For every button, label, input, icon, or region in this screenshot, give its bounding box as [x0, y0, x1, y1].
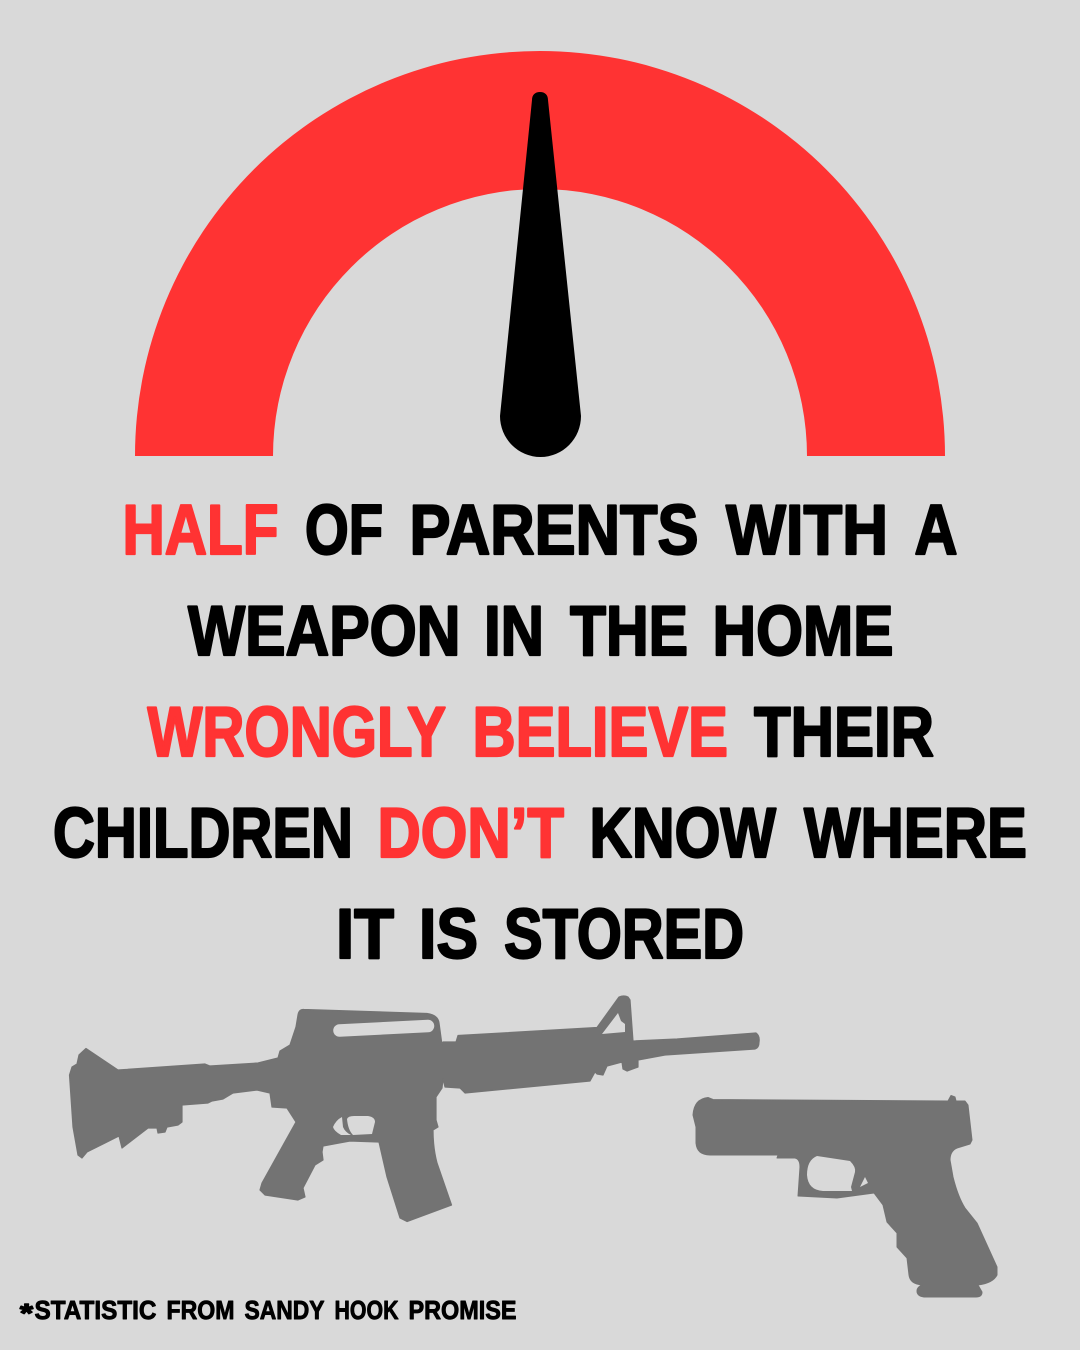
icon: pistol silhouette	[693, 1096, 997, 1297]
line 5: IT	[336, 894, 394, 973]
line 1: WITH	[726, 490, 888, 569]
line 1	[122, 490, 958, 569]
footnote: STATISTIC	[34, 1295, 157, 1325]
footnote: HOOK	[334, 1295, 399, 1325]
line 3: WRONGLY	[148, 692, 446, 771]
rifle trigger opening	[333, 1116, 375, 1135]
rifle front sight opening	[602, 1013, 625, 1034]
line 3: BELIEVE	[472, 692, 728, 771]
line 2	[188, 591, 894, 670]
line 3	[148, 692, 934, 771]
footnote: FROM	[166, 1295, 234, 1325]
line 2: IN	[484, 591, 544, 670]
line 1: A	[914, 490, 958, 569]
line 5: IS	[419, 894, 478, 973]
line 4	[53, 793, 1027, 872]
line 5: STORED	[504, 894, 744, 973]
line 4: CHILDREN	[53, 793, 353, 872]
line 2: THE	[570, 591, 688, 670]
footnote: *	[20, 1298, 34, 1328]
line 1: OF	[305, 490, 383, 569]
line 4: KNOW	[590, 793, 776, 872]
line 1: PARENTS	[410, 490, 698, 569]
pistol trigger guard opening	[807, 1156, 868, 1191]
line 4: DON’T	[378, 793, 564, 872]
line 3: THEIR	[754, 692, 934, 771]
line 2: WEAPON	[188, 591, 460, 670]
icon: rifle silhouette	[70, 996, 759, 1222]
gauge dial	[135, 51, 945, 457]
footnote	[20, 1295, 516, 1328]
line 2: HOME	[712, 591, 894, 670]
gauge needle	[500, 92, 581, 457]
line 1: HALF	[122, 490, 278, 569]
headline	[53, 490, 1027, 973]
line 5	[336, 894, 744, 973]
footnote: PROMISE	[408, 1295, 516, 1325]
gauge arc	[135, 51, 945, 456]
rifle carry-handle slot	[340, 1026, 428, 1030]
line 4: WHERE	[804, 793, 1027, 872]
footnote: SANDY	[244, 1295, 324, 1325]
